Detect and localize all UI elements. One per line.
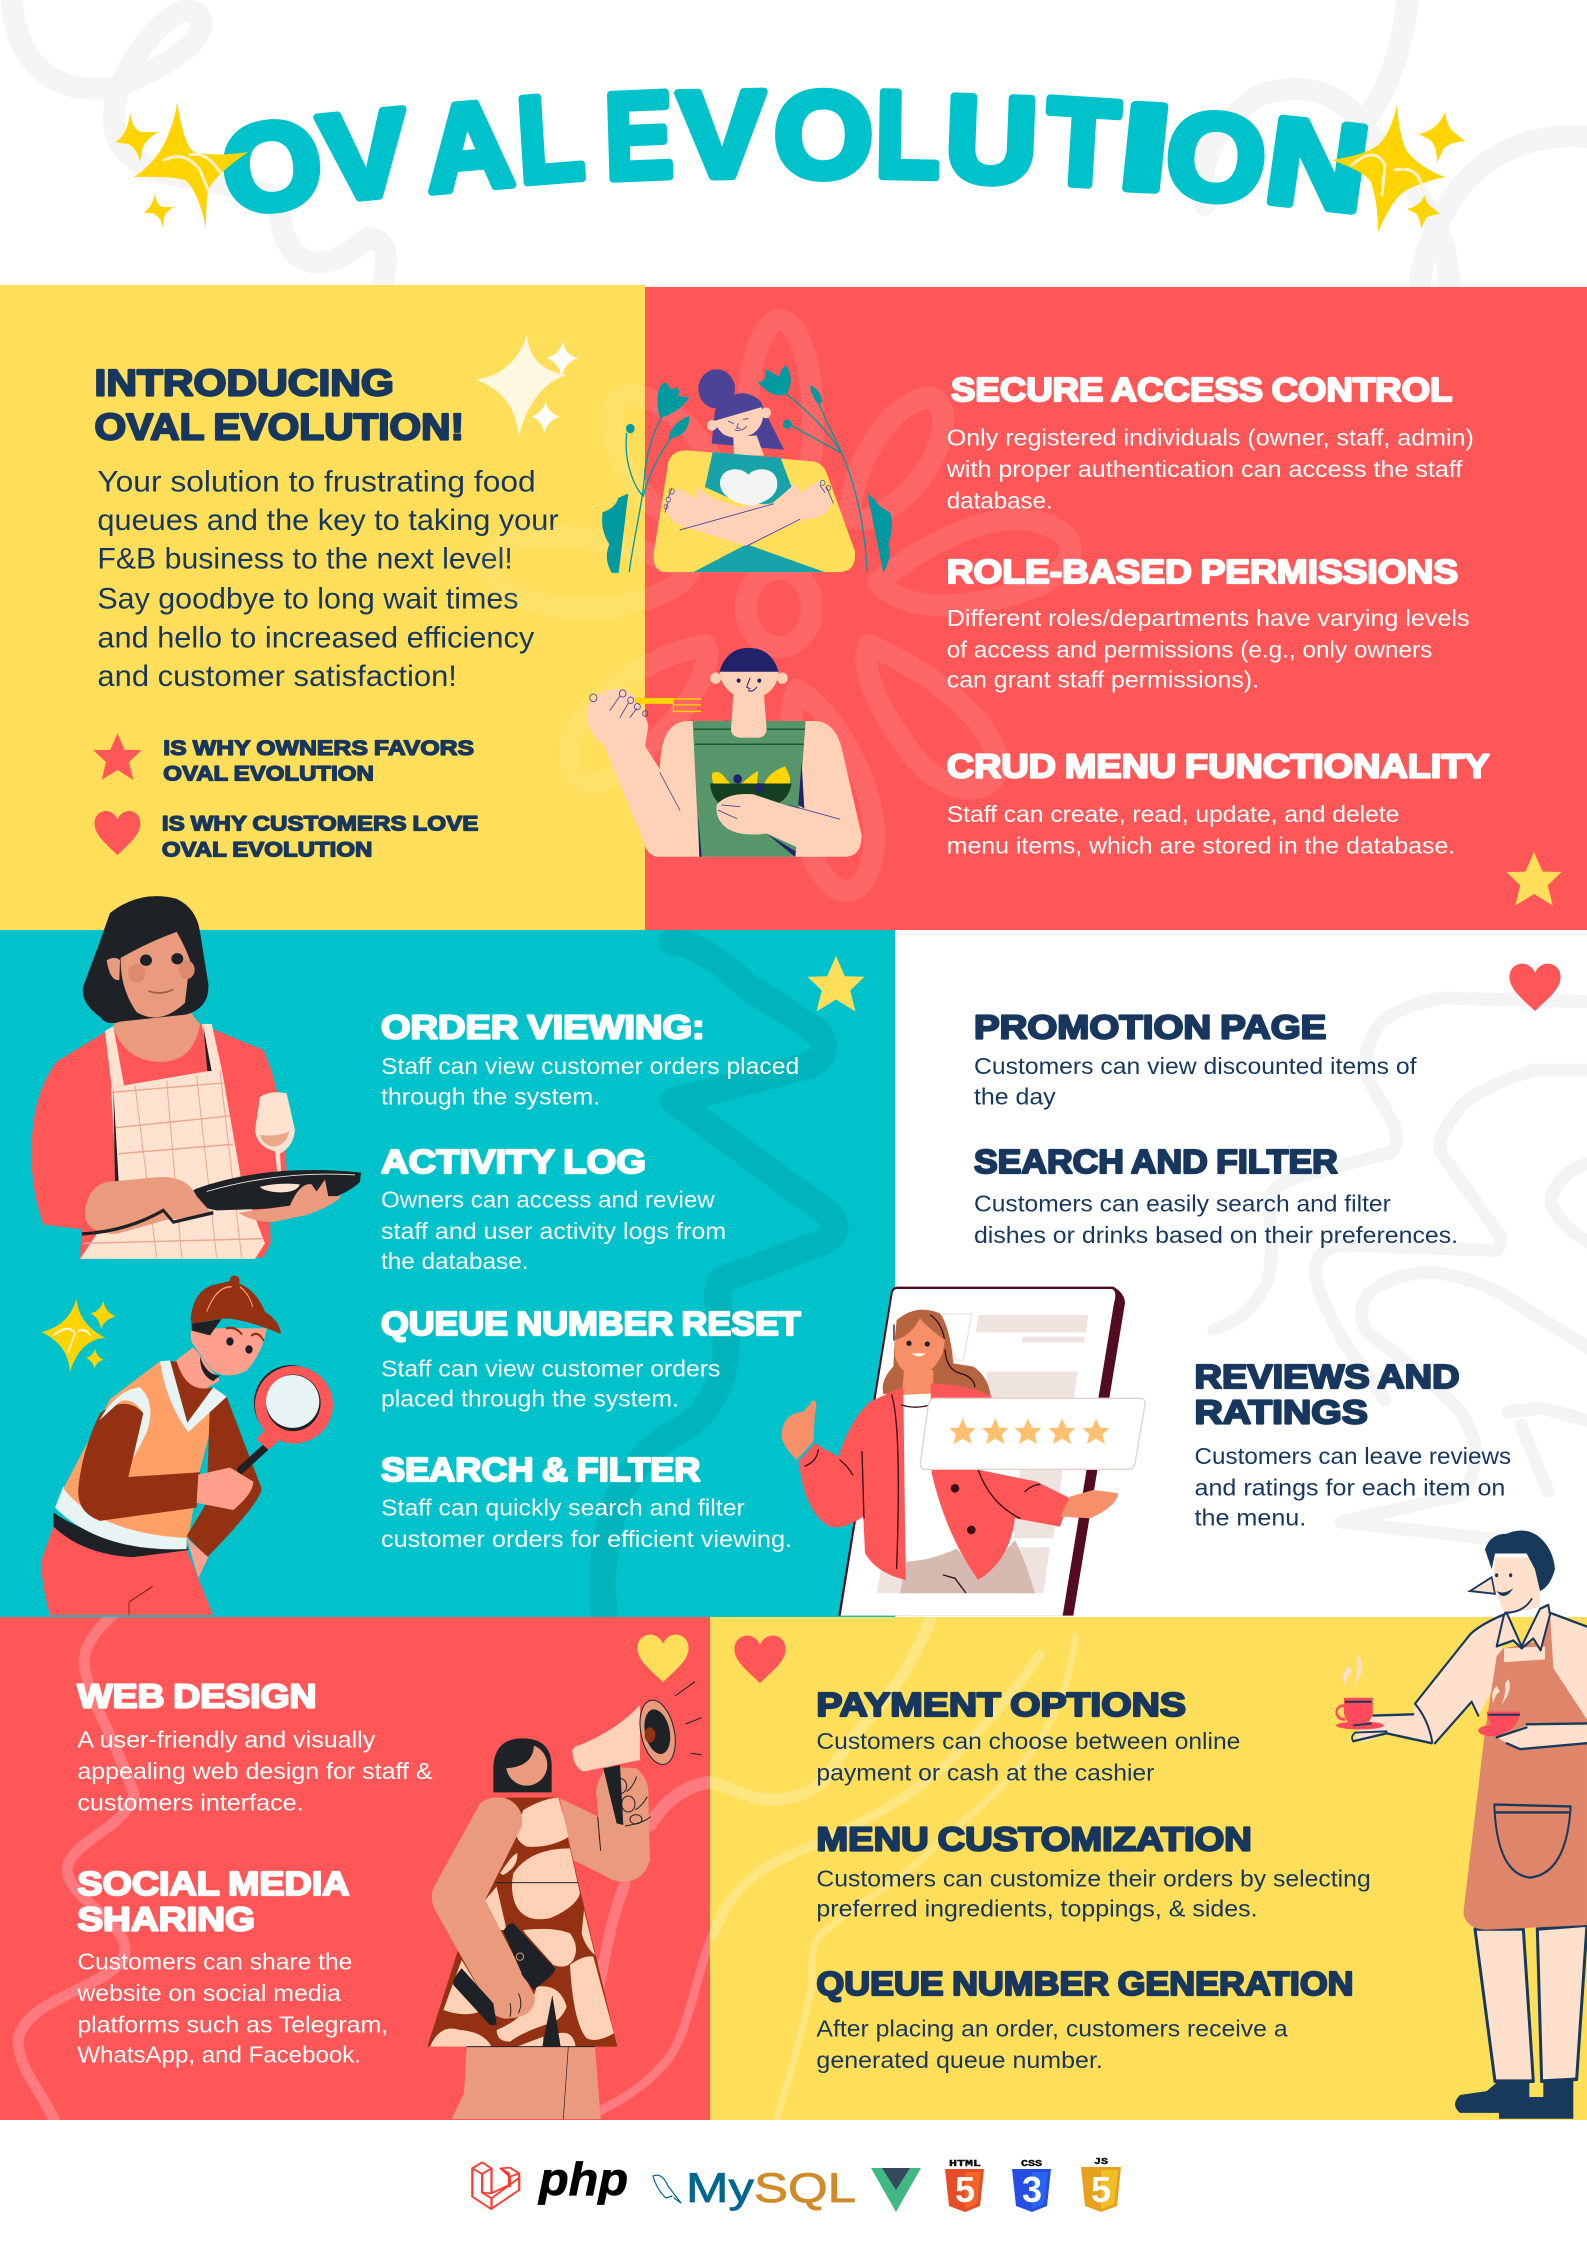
title: L [875, 66, 941, 203]
legend: heart customers [95, 811, 478, 862]
logo: css3: CSS [1021, 2159, 1043, 2169]
heading: introducing [95, 361, 464, 448]
logo: html5: HTML [949, 2159, 981, 2169]
heading: social media sharing: SOCIAL MEDIA [77, 1866, 349, 1903]
heading: promotion page: PROMOTION PAGE [974, 1009, 1326, 1046]
title: U [943, 70, 1040, 209]
text: order viewing [381, 1053, 799, 1109]
text: queue reset: placed through the system. [381, 1386, 679, 1412]
text: reviews: Customers can leave reviews [1195, 1443, 1511, 1469]
logo: css3: 3 [1022, 2169, 1042, 2210]
heading: order viewing: ORDER VIEWING: [381, 1009, 705, 1046]
text: activity log [381, 1186, 726, 1274]
text: web design: A user-friendly and visually [77, 1726, 376, 1752]
title: O [215, 93, 329, 240]
heading: social media sharing [77, 1866, 349, 1939]
text: permissions: of access and permissions (e.g., only owners [947, 636, 1432, 662]
heading: secure access control: SECURE ACCESS CONTROL [951, 372, 1452, 409]
icon: yellow heart [637, 1635, 689, 1682]
logo: javascript: JS [1094, 2157, 1109, 2167]
title: L [512, 69, 586, 209]
title: O [1161, 85, 1271, 230]
heading: search and filter: SEARCH AND FILTER [974, 1144, 1338, 1181]
logo: mysql: My SQL [686, 2164, 856, 2211]
header band [0, 0, 1587, 300]
logo: html5 [945, 2159, 984, 2212]
intro paragraph: and customer satisfaction! [97, 660, 457, 693]
text: customization: preferred ingredients, toppings, & sides. [816, 1895, 1258, 1921]
illustration: detective with magnifier [41, 1275, 333, 1615]
intro paragraph: queues and the key to taking your [97, 504, 559, 537]
text: activity log: Owners can access and review [381, 1186, 715, 1212]
title: V [315, 83, 415, 227]
text: promotion: Customers can view discounted items of [974, 1053, 1417, 1079]
illustration: woman with crossed arms [602, 366, 892, 573]
heading: activity log: ACTIVITY LOG [381, 1144, 646, 1181]
text: queue generation: After placing an order, customers receive a [816, 2016, 1289, 2042]
legend: star owners: IS WHY OWNERS FAVORS [163, 736, 474, 760]
illustration: woman on phone with rating [782, 1287, 1145, 1616]
title: N [1259, 92, 1375, 239]
icon: left title sparkles [115, 102, 248, 228]
illustration: waitress with tray [31, 896, 361, 1259]
panel: staff security features [490, 287, 1587, 930]
text: customization [816, 1865, 1371, 1921]
logo: javascript [1081, 2157, 1121, 2212]
text: activity log: the database. [381, 1248, 529, 1274]
text: queue reset: Staff can view customer orders [381, 1355, 720, 1381]
legend: heart customers: OVAL EVOLUTION [162, 838, 372, 862]
text: search and filter: Customers can easily search and filter [974, 1191, 1391, 1217]
text: reviews: the menu. [1195, 1504, 1306, 1530]
illustration: barista with cups [1336, 1531, 1587, 2119]
logo: javascript: 5 [1091, 2169, 1111, 2210]
text: customization: Customers can customize their orders by selecting [816, 1865, 1371, 1891]
text: search [381, 1494, 792, 1552]
title: O [774, 67, 873, 203]
text: permissions: can grant staff permissions). [947, 667, 1259, 693]
icon: yellow star [1506, 852, 1562, 906]
text: social media: website on social media [76, 1980, 342, 2006]
text: search and filter [974, 1191, 1458, 1248]
text: access control: with proper authentication can access the staff [946, 456, 1463, 482]
logo: vue [871, 2168, 921, 2212]
text: crud [947, 801, 1455, 859]
heading: menu customization: MENU CUSTOMIZATION [816, 1822, 1252, 1859]
icon: red heart [734, 1636, 786, 1683]
text: reviews [1195, 1443, 1511, 1530]
text: access control [946, 424, 1474, 513]
heading: web design: WEB DESIGN [77, 1678, 317, 1715]
text: order viewing: Staff can view customer orders placed [381, 1053, 799, 1079]
text: search: customer orders for efficient viewing. [381, 1526, 792, 1552]
heading: payment options: PAYMENT OPTIONS [816, 1687, 1186, 1724]
heading: reviews and ratings: REVIEWS AND [1195, 1359, 1460, 1396]
title: V [677, 65, 766, 203]
text: social media: WhatsApp, and Facebook. [77, 2042, 361, 2068]
panel: design and sharing [0, 1612, 722, 2125]
title: A [419, 75, 518, 218]
heading: queue number reset: QUEUE NUMBER RESET [381, 1306, 801, 1343]
text: permissions [947, 605, 1470, 693]
intro paragraph [97, 465, 559, 693]
text: order viewing: through the system. [381, 1083, 600, 1109]
icon: red heart [1509, 964, 1561, 1011]
text: payment: Customers can choose between online [816, 1728, 1240, 1754]
heading: role-based permissions: ROLE-BASED PERMISSIONS [947, 554, 1458, 591]
text: payment: payment or cash at the cashier [816, 1759, 1155, 1785]
text: search: Staff can quickly search and filter [381, 1494, 745, 1520]
logo: css3 [1012, 2159, 1051, 2212]
heading: queue number generation: QUEUE NUMBER GENERATION [816, 1966, 1354, 2003]
heading: social media sharing: SHARING [77, 1902, 255, 1939]
panel: staff features [0, 896, 895, 1625]
text: reviews: and ratings for each item on [1195, 1474, 1505, 1500]
text: web design: appealing web design for staff & [77, 1758, 433, 1784]
icon: yellow star [808, 956, 864, 1012]
text: activity log: staff and user activity logs from [381, 1218, 726, 1244]
intro paragraph: and hello to increased efficiency [97, 621, 535, 654]
panel: ordering features [705, 1531, 1587, 2120]
footer: tech logos [0, 2120, 1587, 2245]
text: web design [77, 1726, 433, 1815]
illustration: person eating salad [587, 648, 862, 857]
text: social media: platforms such as Telegram, [77, 2011, 388, 2037]
panel: introduction [0, 285, 645, 930]
intro paragraph: F&B business to the next level! [97, 543, 513, 576]
text: web design: customers interface. [77, 1789, 304, 1815]
illustration: woman with megaphone [427, 1682, 702, 2119]
text: payment [816, 1728, 1240, 1785]
text: crud: menu items, which are stored in the database. [947, 833, 1455, 859]
heading: search and filter: SEARCH & FILTER [381, 1452, 700, 1489]
text: queue reset [381, 1355, 720, 1412]
text: queue generation [816, 2016, 1289, 2073]
icon: laravel [472, 2162, 519, 2209]
icon: white sparkles [476, 335, 579, 437]
heading: reviews and ratings [1195, 1359, 1460, 1432]
logo: html5: 5 [955, 2169, 975, 2210]
legend: star owners: OVAL EVOLUTION [163, 762, 374, 786]
heading: introducing: INTRODUCING [95, 361, 394, 403]
title: I [1114, 78, 1174, 217]
text: search and filter: dishes or drinks based on their preferences. [974, 1222, 1458, 1248]
text: promotion [974, 1053, 1417, 1109]
title: T [1042, 72, 1123, 212]
text: social media: Customers can share the [77, 1948, 352, 1974]
text: social media [76, 1948, 388, 2068]
text: promotion: the day [974, 1083, 1056, 1109]
text: access control: Only registered individuals (owner, staff, admin) [947, 424, 1474, 450]
intro paragraph: Your solution to frustrating food [97, 465, 536, 498]
icon: right title sparkles [1332, 105, 1465, 232]
heading: introducing: OVAL EVOLUTION! [95, 406, 464, 448]
intro paragraph: Say goodbye to long wait times [97, 583, 518, 616]
text: access control: database. [947, 487, 1053, 513]
text: crud: Staff can create, read, update, and delete [947, 801, 1399, 827]
legend: heart customers: IS WHY CUSTOMERS LOVE [162, 812, 478, 836]
logo: php: php [537, 2153, 628, 2205]
heading: reviews and ratings: RATINGS [1195, 1395, 1368, 1432]
legend: star owners [93, 733, 474, 786]
panel: customer features [782, 930, 1587, 1617]
text: permissions: Different roles/departments have varying levels [947, 605, 1470, 631]
heading: crud menu functionality: CRUD MENU FUNCTIONALITY [947, 749, 1490, 786]
title: E [602, 67, 675, 205]
text: queue generation: generated queue number. [816, 2047, 1103, 2073]
